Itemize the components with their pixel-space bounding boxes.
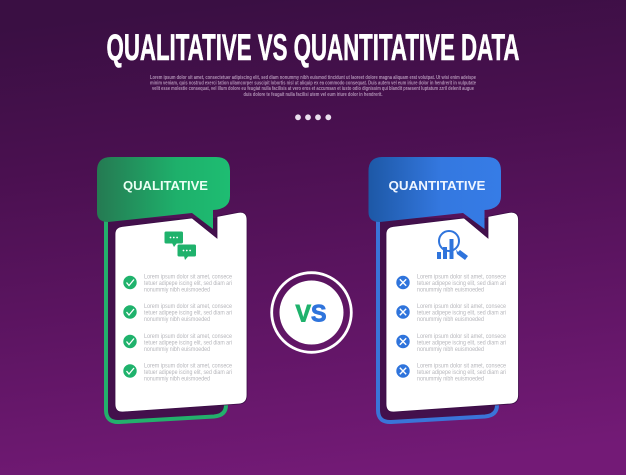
list item 1: nonummiy nibh euismoeded: [144, 288, 210, 294]
list item 1: [123, 274, 233, 294]
list item 4: [123, 363, 233, 382]
icon: magnifier over bar chart: [437, 231, 468, 260]
card outline: [378, 218, 497, 422]
list item 1: Lorem ipsum dolor sit amet, consece: [144, 274, 233, 280]
list item 3: tetuer adipepe iscing elit, sed diam ari: [144, 340, 232, 346]
speech bubble header: [97, 157, 230, 229]
list item 2: nonummiy nibh euismoeded: [417, 317, 484, 323]
intro paragraph: Lorem ipsum dolor sit amet, consectetuer adipiscing elit, sed diam nonummy nibh euismod tincidunt ut laoreet dolore magna aliquam erat volutpat. Ut wisi enim adeispe: [150, 75, 476, 81]
list item 1: tetuer adipepe iscing elit, sed diam ari: [144, 281, 232, 287]
list item 3: [123, 334, 233, 353]
speech bubble header: [368, 157, 501, 229]
card outline: [106, 218, 226, 422]
panel: qualitative: [97, 157, 247, 422]
intro paragraph: [150, 75, 476, 98]
list item 1: tetuer adipepe iscing elit, sed diam ari: [417, 281, 506, 287]
white card: [386, 212, 518, 412]
list item 1: Lorem ipsum dolor sit amet, consece: [417, 274, 507, 280]
list item 2: tetuer adipepe iscing elit, sed diam ari: [417, 310, 506, 316]
list item 3: nonummiy nibh euismoeded: [417, 347, 484, 353]
list item 2: [123, 304, 233, 323]
list item 2: Lorem ipsum dolor sit amet, consece: [144, 304, 233, 310]
list item 2: [396, 304, 507, 323]
list item 3: tetuer adipepe iscing elit, sed diam ari: [417, 340, 506, 346]
list item 4: Lorem ipsum dolor sit amet, consece: [144, 363, 233, 369]
intro paragraph: duis dolore te feugait nulla facilisi utem vel eum iriure dolor in hendrerit.: [244, 92, 383, 98]
list item 3: [396, 334, 507, 353]
list item 4: nonummiy nibh euismoeded: [144, 376, 210, 382]
icon: chat bubbles: [164, 232, 196, 260]
list item 4: tetuer adipepe iscing elit, sed diam ari: [417, 370, 506, 376]
header label: QUANTITATIVE: [388, 178, 486, 193]
vs badge: [272, 273, 351, 352]
list item 4: [396, 363, 507, 382]
panel: quantitative: [368, 157, 518, 422]
list item 3: Lorem ipsum dolor sit amet, consece: [144, 334, 233, 340]
list item 1: [396, 274, 507, 294]
list item 1: nonummiy nibh euismoeded: [417, 288, 484, 294]
list item 3: Lorem ipsum dolor sit amet, consece: [417, 334, 507, 340]
list item 4: Lorem ipsum dolor sit amet, consece: [417, 363, 507, 369]
intro paragraph: velit esse molestie consequat, vel illum dolore eu feugiat nulla facilisis at vero eros et accumsan et iusto odio dignissim qui blandit praesent luptatum zzril delenit augue: [152, 86, 474, 92]
header label: QUALITATIVE: [123, 178, 208, 193]
list item 2: tetuer adipepe iscing elit, sed diam ari: [144, 310, 232, 316]
pagination dots: [295, 114, 331, 120]
list item 2: Lorem ipsum dolor sit amet, consece: [417, 304, 507, 310]
list item 4: tetuer adipepe iscing elit, sed diam ari: [144, 370, 232, 376]
vs badge: VS: [296, 300, 326, 328]
list item 3: nonummiy nibh euismoeded: [144, 347, 210, 353]
intro paragraph: minim veniam, quis nostrud exerci tation ullamcorper suscipit lobortis nisl ut aliquip ex ea commodo consequat. Duis autem vel eum iriure dolor in hendrerit in vulputate: [150, 81, 476, 87]
list item 2: nonummiy nibh euismoeded: [144, 317, 210, 323]
list item 4: nonummiy nibh euismoeded: [417, 376, 484, 382]
white card: [115, 212, 247, 412]
